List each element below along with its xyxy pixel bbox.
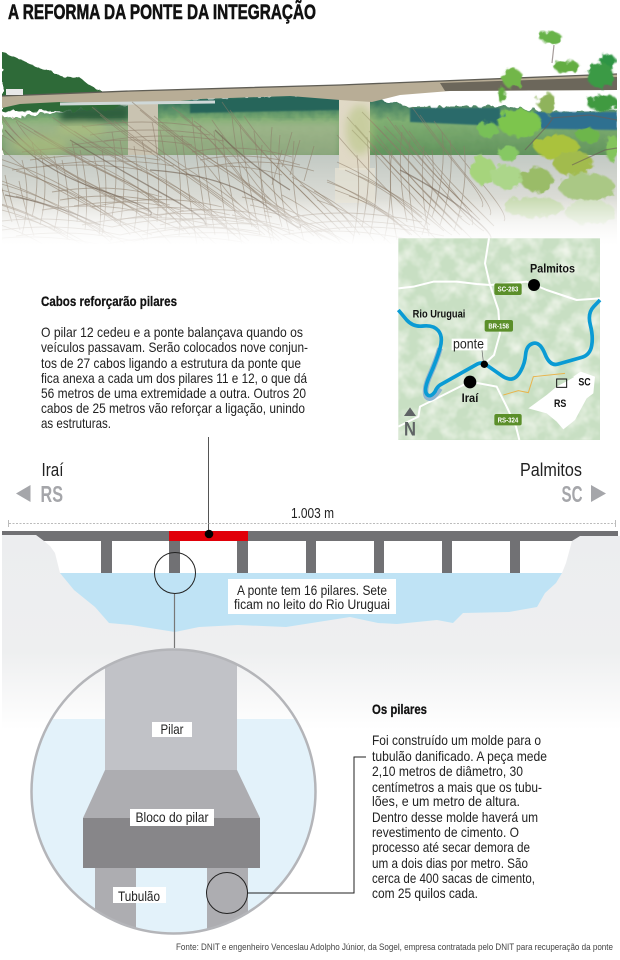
river Uruguai	[398, 300, 600, 398]
red section of deck	[169, 531, 248, 541]
state labels	[554, 377, 591, 410]
body: os pilares: revestimento de cimento. O	[372, 824, 519, 840]
callout: 16 pillars: ficam no leito do Rio Uruguai	[234, 596, 390, 612]
label: Tubulão: Tubulão	[118, 888, 160, 904]
right tree	[471, 31, 619, 224]
photo: bridge over the river	[0, 31, 620, 258]
road shield BR-158	[485, 320, 513, 332]
text block: pillars	[372, 702, 547, 901]
deck	[2, 531, 618, 541]
locator map	[397, 238, 602, 440]
map roads	[398, 238, 600, 440]
callout: 16 pillars: A ponte tem 16 pilares. Sete	[237, 582, 387, 598]
tan wash of dry branches	[2, 122, 340, 160]
dark hill band under the deck	[190, 95, 340, 113]
city: Palmitos	[528, 261, 575, 291]
body: os pilares	[372, 732, 547, 901]
dry branches	[0, 102, 505, 250]
body: os pilares: cerca de 400 sacas de cimento,	[372, 870, 535, 886]
city: Iraí: Iraí	[462, 391, 479, 405]
road shield RS-324	[494, 414, 522, 425]
body: os pilares: lões, e um metro de altura.	[372, 793, 520, 809]
state labels: RS	[554, 398, 566, 410]
body: cabos	[41, 324, 308, 431]
truck on deck	[6, 89, 23, 95]
heading: cabos: Cabos reforçarão pilares	[41, 294, 177, 309]
body: cabos: cabos de 25 metros vão reforçar a ligação, unindo	[41, 400, 305, 416]
direction: Iraí RS: Iraí	[42, 459, 64, 480]
city: Iraí	[462, 376, 479, 405]
left hill	[2, 52, 120, 112]
direction: Iraí RS: RS	[40, 481, 63, 507]
dimension: bridge length	[8, 506, 616, 527]
heading: os pilares: Os pilares	[372, 702, 427, 717]
city: Palmitos: Palmitos	[530, 261, 575, 275]
body: os pilares: 2,10 metros de diâmetro, 30	[372, 763, 523, 779]
dot on red section	[205, 530, 213, 538]
leader line from cables text	[208, 437, 210, 533]
body: cabos: O pilar 12 cedeu e a ponte balançava quando os	[41, 324, 303, 340]
direction: Palmitos SC: Palmitos	[520, 459, 582, 480]
road shield SC-283: SC-283	[498, 287, 518, 294]
title: A REFORMA DA PONTE DA INTEGRAÇÃO	[8, 1, 316, 24]
tubuloes	[95, 868, 136, 928]
background hills	[2, 95, 617, 160]
label: Rio Uruguai: Rio Uruguai	[413, 308, 465, 320]
state labels: SC	[578, 377, 591, 389]
north arrow	[404, 407, 416, 440]
pillars	[101, 541, 520, 573]
body: os pilares: centímetros a mais que os tubu-	[372, 779, 542, 795]
body: os pilares: com 25 quilos cada.	[372, 885, 478, 901]
bridge cross section	[2, 530, 620, 730]
bridge deck	[2, 74, 617, 108]
pillar block	[83, 770, 260, 818]
river	[2, 155, 617, 227]
direction: Palmitos SC: SC	[562, 481, 583, 507]
label: ponte	[452, 335, 488, 368]
body: cabos: as estruturas.	[41, 415, 111, 431]
body: cabos: 56 metros de uma extremidade a outra. Outros 20	[41, 385, 306, 401]
road shield RS-324: RS-324	[498, 417, 518, 424]
dimension: bridge length: 1.003 m	[291, 506, 334, 522]
road shield SC-283	[494, 283, 522, 295]
north arrow: N	[404, 419, 416, 440]
body: os pilares: processo até secar demora de	[372, 839, 530, 855]
label: ponte: ponte	[453, 335, 484, 351]
detail circle: pillar foundation	[20, 650, 366, 939]
state shape RS and SC	[528, 377, 593, 429]
body: os pilares: Foi construído um molde para o	[372, 732, 541, 748]
photo fade to white	[0, 198, 620, 245]
label: Bloco do pilar: Bloco do pilar	[136, 809, 209, 825]
direction: Iraí RS	[16, 459, 64, 507]
bridge pillars	[128, 100, 158, 155]
body: os pilares: um a dois dias por metro. São	[372, 855, 528, 871]
body: cabos: veículos passavam. Serão colocados nove conjun-	[41, 339, 308, 355]
callout: 16 pillars	[228, 579, 396, 614]
zoom circle	[154, 552, 196, 594]
ground	[2, 535, 620, 730]
body: cabos: fica anexa a cada um dos pilares 11 e 12, o que dá	[41, 370, 307, 386]
label: Pilar: Pilar	[160, 721, 184, 737]
body: os pilares: Dentro desse molde haverá um	[372, 809, 538, 825]
text block: cables	[41, 294, 308, 431]
body: os pilares: tubulão danificado. A peça mede	[372, 748, 547, 764]
body: cabos: tos de 27 cabos ligando a estrutura da ponte que	[41, 355, 301, 371]
road shield BR-158: BR-158	[488, 323, 509, 330]
river water	[60, 573, 562, 632]
direction: Palmitos SC	[520, 459, 606, 507]
pillar	[105, 650, 237, 770]
small circle and leader	[206, 757, 366, 914]
